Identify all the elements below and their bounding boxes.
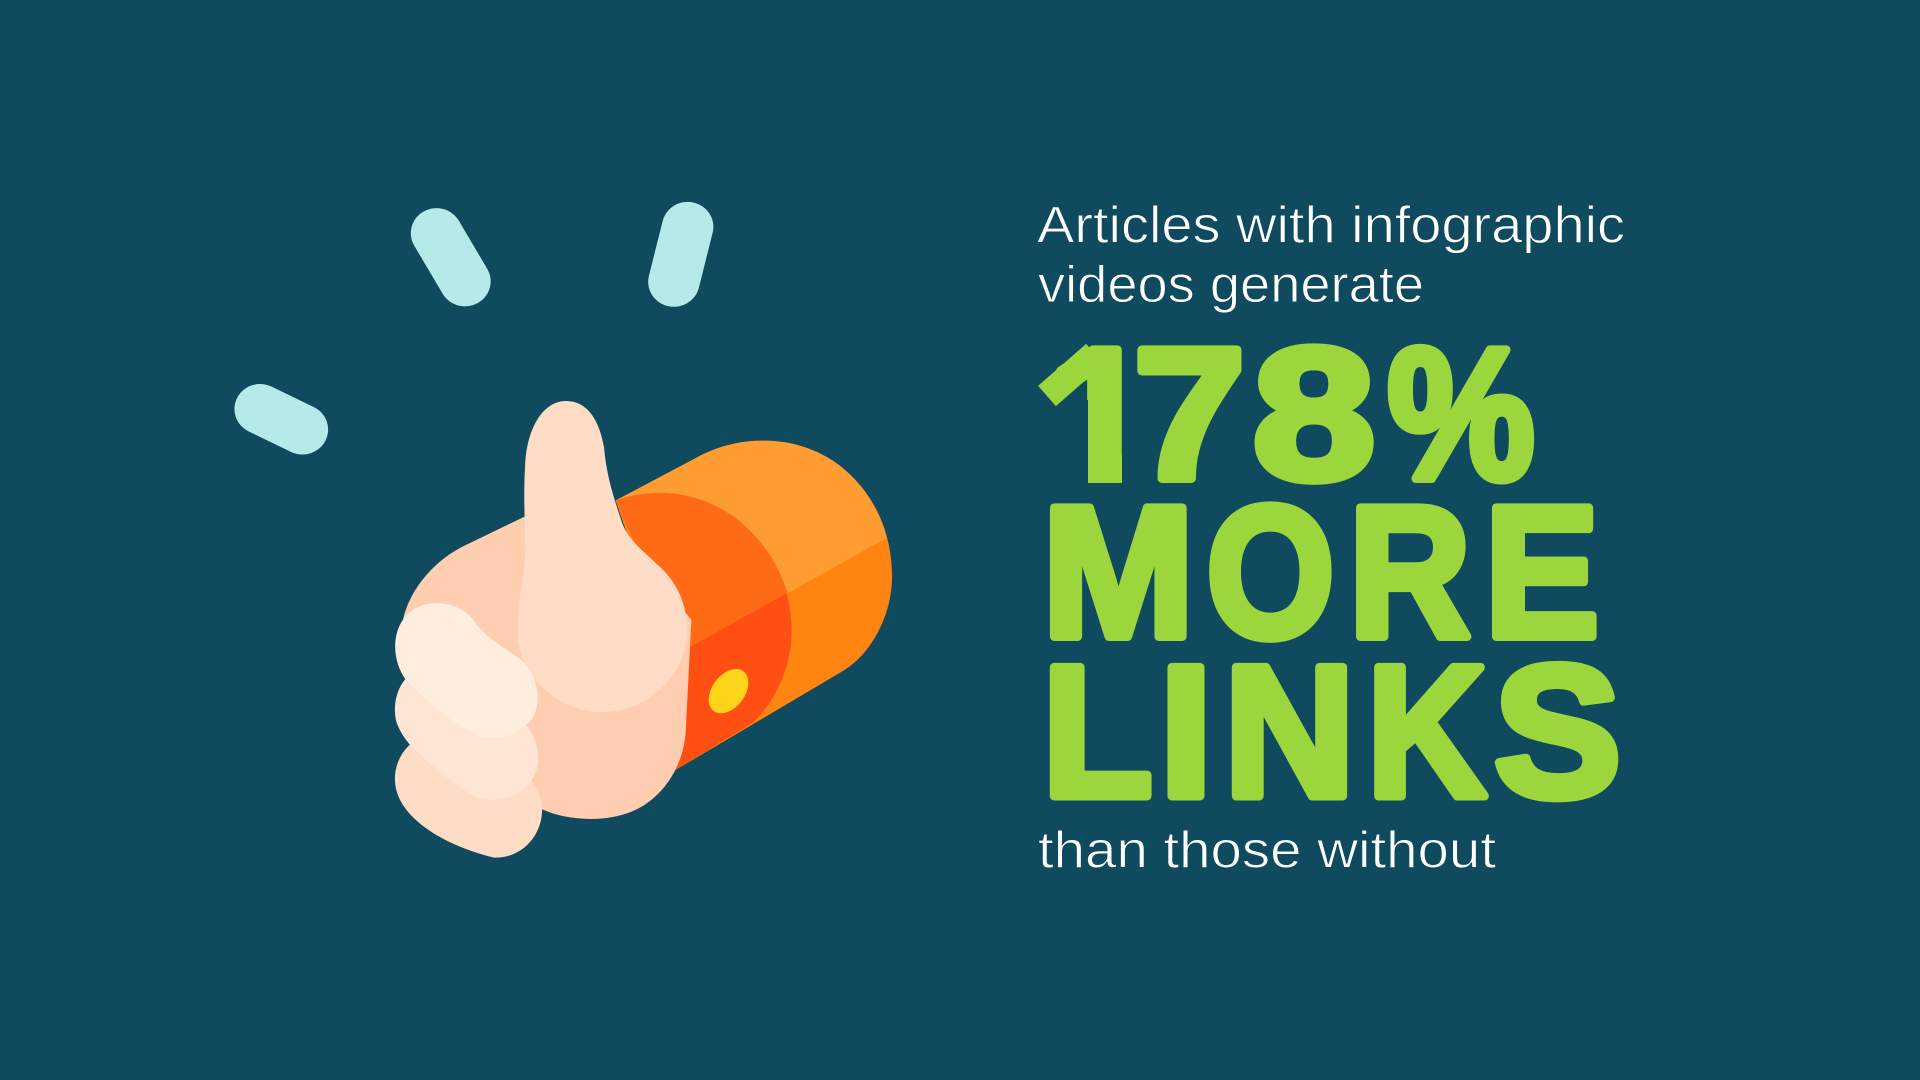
intro line one: Articles with infographic (1037, 196, 1625, 254)
icon: cuff button (701, 662, 757, 720)
headline word links: L (1042, 627, 1153, 836)
headline word more (1042, 468, 1599, 676)
headline word more: E (1485, 468, 1599, 676)
middle finger (395, 679, 538, 800)
headline word more: R (1349, 468, 1471, 676)
closing line: than those without (1038, 822, 1497, 880)
icon: left spark (260, 409, 302, 430)
text block: statistic (1037, 196, 1625, 880)
headline word more: O (1206, 468, 1335, 676)
headline word links: N (1224, 627, 1355, 836)
headline number: % (1388, 310, 1534, 518)
intro line two: videos generate (1038, 256, 1424, 314)
cuff upper (616, 493, 787, 651)
headline word links: S (1494, 627, 1621, 836)
headline word links: I (1159, 627, 1213, 836)
cuff lower (673, 593, 792, 771)
sleeve upper (616, 441, 887, 650)
headline number (1038, 343, 1534, 485)
headline word more: M (1042, 468, 1194, 676)
headline number: 8 (1253, 310, 1375, 518)
index finger (395, 603, 538, 738)
icon: top-right spark (674, 227, 688, 282)
headline number: 1 (1048, 310, 1152, 518)
palm (403, 517, 691, 819)
bottom finger (395, 745, 542, 858)
thumb (518, 401, 688, 712)
icon: top-left spark (436, 233, 465, 281)
headline word links: K (1367, 627, 1486, 836)
headline number: 7 (1134, 310, 1246, 518)
sleeve lower (616, 441, 892, 771)
icon: thumbs up illustration (260, 227, 892, 858)
headline word links (1042, 627, 1621, 836)
